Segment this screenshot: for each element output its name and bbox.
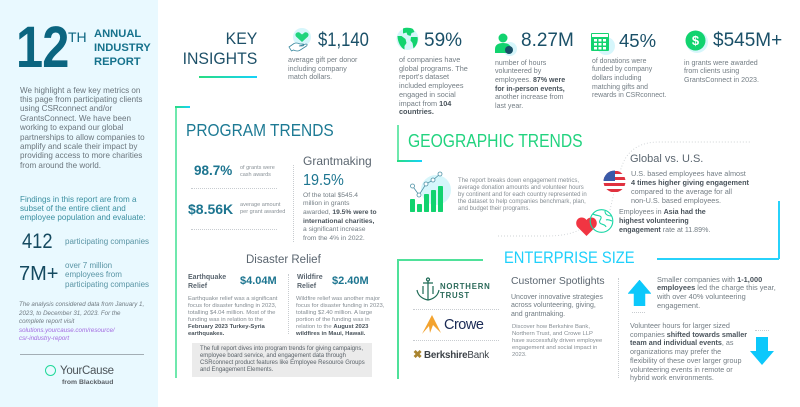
intro text: GrantsConnect. We have been: [20, 114, 131, 123]
stat: 59%: of companies have: [399, 55, 460, 64]
findings intro: employee population and evaluate:: [20, 213, 146, 222]
stat: $1,140: average gift per donor: [288, 56, 357, 64]
intro text: partnerships to allow companies to: [20, 133, 145, 142]
stat: 45%: rewards in CSRconnect.: [592, 92, 666, 99]
callout: full report note: employee board service, and engagement data through: [200, 352, 346, 358]
methodology note: solutions.yourcause.com/resource/: [19, 327, 115, 334]
block: global vs US: 4 times higher giving engagement: [631, 178, 749, 186]
text: geographic intro: the dataset to help companies benchmark, plan,: [458, 198, 586, 204]
block: wildfire relief: relation to the August 2023: [296, 324, 368, 330]
stat: 8.27M: volunteered by: [495, 68, 541, 75]
stat: 59%: countries.: [399, 107, 434, 116]
stat: 59%: global programs. The: [399, 64, 468, 73]
stat: 7M+ employees: [19, 261, 149, 289]
block: earthquake relief: Earthquake relief was a significant: [188, 296, 277, 302]
icon: bar chart with trend line: [410, 172, 451, 212]
block: wildfire relief: Wildfire relief was another major: [296, 296, 380, 302]
panel: program trends: [175, 106, 384, 378]
block: grantmaking: Of the total $545.4: [303, 192, 358, 198]
block: global vs US: non-U.S. based employees.: [631, 196, 721, 204]
intro text: amplify and scale their impact by: [20, 142, 137, 151]
stat: 45%: matching gifts and: [592, 84, 648, 91]
panel: left sidebar: [0, 0, 158, 407]
heading: disaster relief: Disaster Relief: [246, 254, 321, 266]
text: geographic intro: average donation amounts and volunteer hours: [458, 184, 584, 190]
stat: 98.7% grants: cash awards: [240, 172, 271, 178]
stat: 45%: [591, 30, 666, 99]
icon: red heart: [576, 218, 597, 236]
callout: full report note: and Engagement Elements.: [200, 366, 273, 372]
findings intro: [20, 194, 146, 222]
logo: YourCause from Blackbaud: YourCause: [60, 365, 114, 377]
icon: up arrow: [628, 280, 651, 306]
text: larger companies: team and individual events, as: [630, 338, 733, 347]
logo: YourCause from Blackbaud: from Blackbaud: [62, 379, 113, 386]
text: Asia volunteering: highest volunteering: [619, 216, 689, 224]
title: 12th annual industry report: ANNUAL: [94, 28, 141, 40]
block: earthquake relief: Relief: [188, 283, 207, 290]
block: grantmaking: million in grants: [303, 200, 349, 207]
block: earthquake relief: totalling $4.04 million. Most of the: [188, 310, 275, 316]
stat: $1,140: including company: [288, 65, 347, 73]
block: wildfire relief: [296, 274, 384, 336]
block: customer spotlights: Uncover innovative strategies: [511, 294, 603, 300]
block: earthquake relief: February 2023 Turkey-Syria: [188, 324, 265, 330]
findings intro: Findings in this report are from a: [20, 194, 137, 204]
intro text: We highlight a few key metrics on: [20, 86, 140, 94]
block: earthquake relief: [188, 274, 278, 336]
block: grantmaking: awarded, 19.5% were to: [303, 209, 377, 216]
text: Asia volunteering: [619, 208, 710, 234]
block: global vs US: compared to the average for all: [631, 186, 732, 196]
block: wildfire relief: focus for disaster funding in 2023,: [296, 302, 384, 308]
block: wildfire relief: $2.40M: [332, 275, 369, 287]
text: smaller companies: employees led the charge this year,: [657, 283, 776, 292]
stat: 98.7% grants: [194, 163, 275, 178]
stat: $8.56K: per grant awarded: [240, 209, 285, 215]
stat: 412 participating companies: [22, 230, 149, 253]
text: geographic intro: by continent and for each country represented in: [458, 192, 587, 198]
icon: US flag: [604, 170, 626, 192]
text: larger companies: companies shifted towards smaller: [630, 330, 747, 339]
title: 12th annual industry report: INDUSTRY: [94, 42, 151, 54]
block: customer spotlights: have successfully driven employee: [512, 338, 602, 344]
logo: Berkshire Bank: ✖: [413, 349, 422, 361]
stat: 8.27M: employees. 87% were: [495, 77, 565, 84]
heading: key insights: INSIGHTS: [182, 49, 257, 68]
logo: Northern Trust: NORTHERN: [440, 282, 491, 290]
stat: $545M+: from clients using: [684, 67, 739, 75]
text: smaller companies: with over 40% volunteering: [657, 292, 746, 301]
block: grantmaking: 19.5%: [303, 172, 344, 189]
block: customer spotlights: 2023.: [512, 352, 527, 358]
stat: 45%: of donations were: [592, 58, 646, 64]
stat: 45%: dollars including: [592, 75, 641, 82]
stat: 8.27M: for in-person events,: [495, 86, 565, 93]
methodology note: 2023, to December 31, 2023. For the: [19, 310, 120, 317]
block: wildfire relief: Relief: [297, 283, 316, 290]
dotted connector: [498, 142, 750, 236]
title: 12th annual industry report: TH: [68, 29, 87, 45]
methodology note: [19, 301, 144, 342]
block: earthquake relief: funding was in relation to the: [188, 316, 263, 322]
stat: 45%: 45%: [619, 30, 656, 51]
intro text: [20, 86, 145, 170]
block: grantmaking: Grantmaking: [303, 154, 372, 168]
intro text: from around the world.: [20, 161, 101, 170]
block: customer spotlights: [511, 276, 605, 358]
stat: 8.27M: [495, 30, 574, 110]
stat: 8.27M: another increase from: [495, 94, 564, 101]
block: wildfire relief: portion of the funding was in: [296, 316, 370, 322]
text: larger companies: Volunteer hours for larger sized: [630, 321, 730, 330]
stat: $545M+: GrantsConnect in 2023.: [684, 76, 759, 84]
text: larger companies: volunteering events in remote or: [630, 365, 733, 374]
stat: 59%: impact from 104: [399, 99, 451, 108]
title: 12th annual industry report: 12: [16, 15, 69, 80]
text: geographic intro: and budget their programs.: [458, 206, 530, 212]
icon: volunteer person: [495, 34, 517, 56]
intro text: this page from participating clients: [20, 95, 142, 104]
block: grantmaking: international charities,: [303, 218, 374, 225]
logo: Northern Trust: TRUST: [440, 291, 470, 300]
block: earthquake relief: focus for disaster funding in 2023,: [188, 302, 276, 308]
stat: $1,140: [288, 28, 369, 81]
stat: $1,140: $1,140: [318, 30, 369, 51]
icon: green globe: [396, 28, 418, 50]
block: customer spotlights: Discover how Berkshire Bank,: [512, 324, 590, 330]
stat: 8.27M: last year.: [495, 103, 523, 110]
intro text: using CSRconnect and/or: [20, 104, 112, 113]
text: larger companies: flexibility of these over larger group: [630, 356, 741, 365]
stat: 8.27M: 8.27M: [521, 30, 574, 51]
intro text: working to expand our global: [20, 123, 124, 132]
block: earthquake relief: $4.04M: [240, 275, 277, 287]
methodology note: csr-industry-report: [19, 335, 69, 342]
callout: full report note: The full report dives into program trends for giving campaigns,: [200, 346, 363, 352]
title: 12th annual industry report: [16, 15, 151, 80]
stat: $545M+: $545M+: [713, 30, 782, 51]
stat: $1,140: match dollars.: [288, 73, 332, 81]
icon: dollar coin: [686, 30, 708, 53]
heading: program trends: PROGRAM TRENDS: [186, 120, 334, 140]
stat: 7M+ employees: over 7 million: [65, 261, 112, 270]
block: customer spotlights: engagement and social impact in: [512, 345, 597, 351]
logo: Northern Trust: [416, 277, 491, 301]
panel: enterprise size: [397, 201, 780, 382]
block: customer spotlights: Northern Trust, and Crowe LLP: [512, 331, 593, 337]
block: wildfire relief: totalling $2.40 million. A large: [296, 310, 372, 316]
stat: 7M+ employees: participating companies: [65, 280, 149, 289]
stat: 59%: included employees: [399, 81, 464, 90]
intro text: providing access to more charities: [20, 151, 142, 160]
stat: 8.27M: number of hours: [495, 60, 546, 66]
block: customer spotlights: Customer Spotlights: [511, 276, 605, 287]
block: wildfire relief: Wildfire: [297, 274, 323, 281]
block: grantmaking: a significant increase: [303, 226, 365, 233]
heading: enterprise size: ENTERPRISE SIZE: [504, 249, 635, 267]
methodology note: The analysis considered data from January 1,: [19, 301, 144, 308]
stat: 59%: report's dataset: [399, 72, 449, 81]
text: larger companies: hybrid work environments.: [630, 373, 714, 382]
callout: full report note: CSRconnect product features like Employee Resource Groups: [200, 360, 365, 366]
block: global vs US: U.S. based employees have almost: [631, 168, 746, 178]
stat: $8.56K: average amount: [240, 202, 280, 208]
stat: $8.56K: $8.56K: [188, 201, 233, 217]
stat: $545M+: [684, 30, 782, 84]
icon: heart in hand: [288, 28, 311, 52]
stat: 59%: [396, 28, 468, 116]
icon: dollar coin: $: [692, 33, 700, 48]
heading: geographic trends: GEOGRAPHIC TRENDS: [408, 131, 583, 151]
title: 12th annual industry report: REPORT: [94, 56, 141, 68]
block: global vs US: [630, 153, 749, 204]
panel: geographic trends: [397, 125, 750, 236]
logo: Berkshire Bank: BerkshireBank: [424, 350, 489, 361]
icon: down arrow: [750, 337, 774, 365]
stat: 7M+ employees: employees from: [65, 270, 122, 279]
text: geographic intro: [458, 178, 587, 212]
stat: 98.7% grants: 98.7%: [194, 163, 232, 178]
stat: $545M+: in grants were awarded: [684, 58, 758, 66]
heading: key insights: [182, 29, 257, 78]
text: Asia volunteering: Employees in Asia had the: [619, 208, 706, 216]
callout: full report note: [192, 343, 372, 377]
text: smaller companies: Smaller companies with 1-1,000: [657, 274, 762, 284]
stat: 7M+ employees: 7M+: [19, 263, 58, 285]
block: earthquake relief: Earthquake: [188, 274, 226, 281]
methodology note: complete report visit: [19, 318, 74, 325]
block: global vs US: Global vs. U.S.: [630, 153, 703, 165]
text: geographic intro: The report breaks down engagement metrics,: [458, 178, 579, 184]
stat: 45%: funded by company: [592, 66, 652, 73]
block: customer spotlights: across volunteering, giving,: [511, 302, 596, 309]
block: earthquake relief: earthquakes.: [188, 330, 224, 336]
text: larger companies: organizations may prefer the: [630, 347, 721, 356]
block: customer spotlights: and grantmaking.: [511, 310, 565, 318]
text: smaller companies: [657, 274, 776, 310]
text: Asia volunteering: engagement rate at 11.89%.: [619, 226, 710, 234]
heading: key insights: KEY: [225, 29, 257, 48]
text: larger companies: [630, 321, 747, 382]
stat: 412 participating companies: 412: [22, 230, 52, 253]
text: smaller companies: engagement.: [657, 301, 700, 310]
icon: outlined globe: [590, 209, 614, 233]
stat: 59%: 59%: [424, 30, 462, 51]
stat: $8.56K: [188, 201, 285, 217]
findings intro: subset of the entire client and: [20, 204, 126, 213]
icon: calendar: [591, 33, 615, 55]
block: wildfire relief: wildfires in Maui, Hawaii.: [296, 330, 365, 336]
stat: 59%: engaged in social: [399, 90, 456, 99]
stat: 412 participating companies: participating companies: [65, 237, 149, 246]
logo: Crowe: [422, 315, 484, 334]
block: grantmaking: from the 4% in 2022.: [303, 235, 365, 242]
block: grantmaking: [303, 154, 377, 242]
logo: Crowe: Crowe: [444, 317, 483, 333]
logo: YourCause from Blackbaud: [45, 365, 114, 386]
stat: 98.7% grants: of grants were: [240, 164, 275, 170]
